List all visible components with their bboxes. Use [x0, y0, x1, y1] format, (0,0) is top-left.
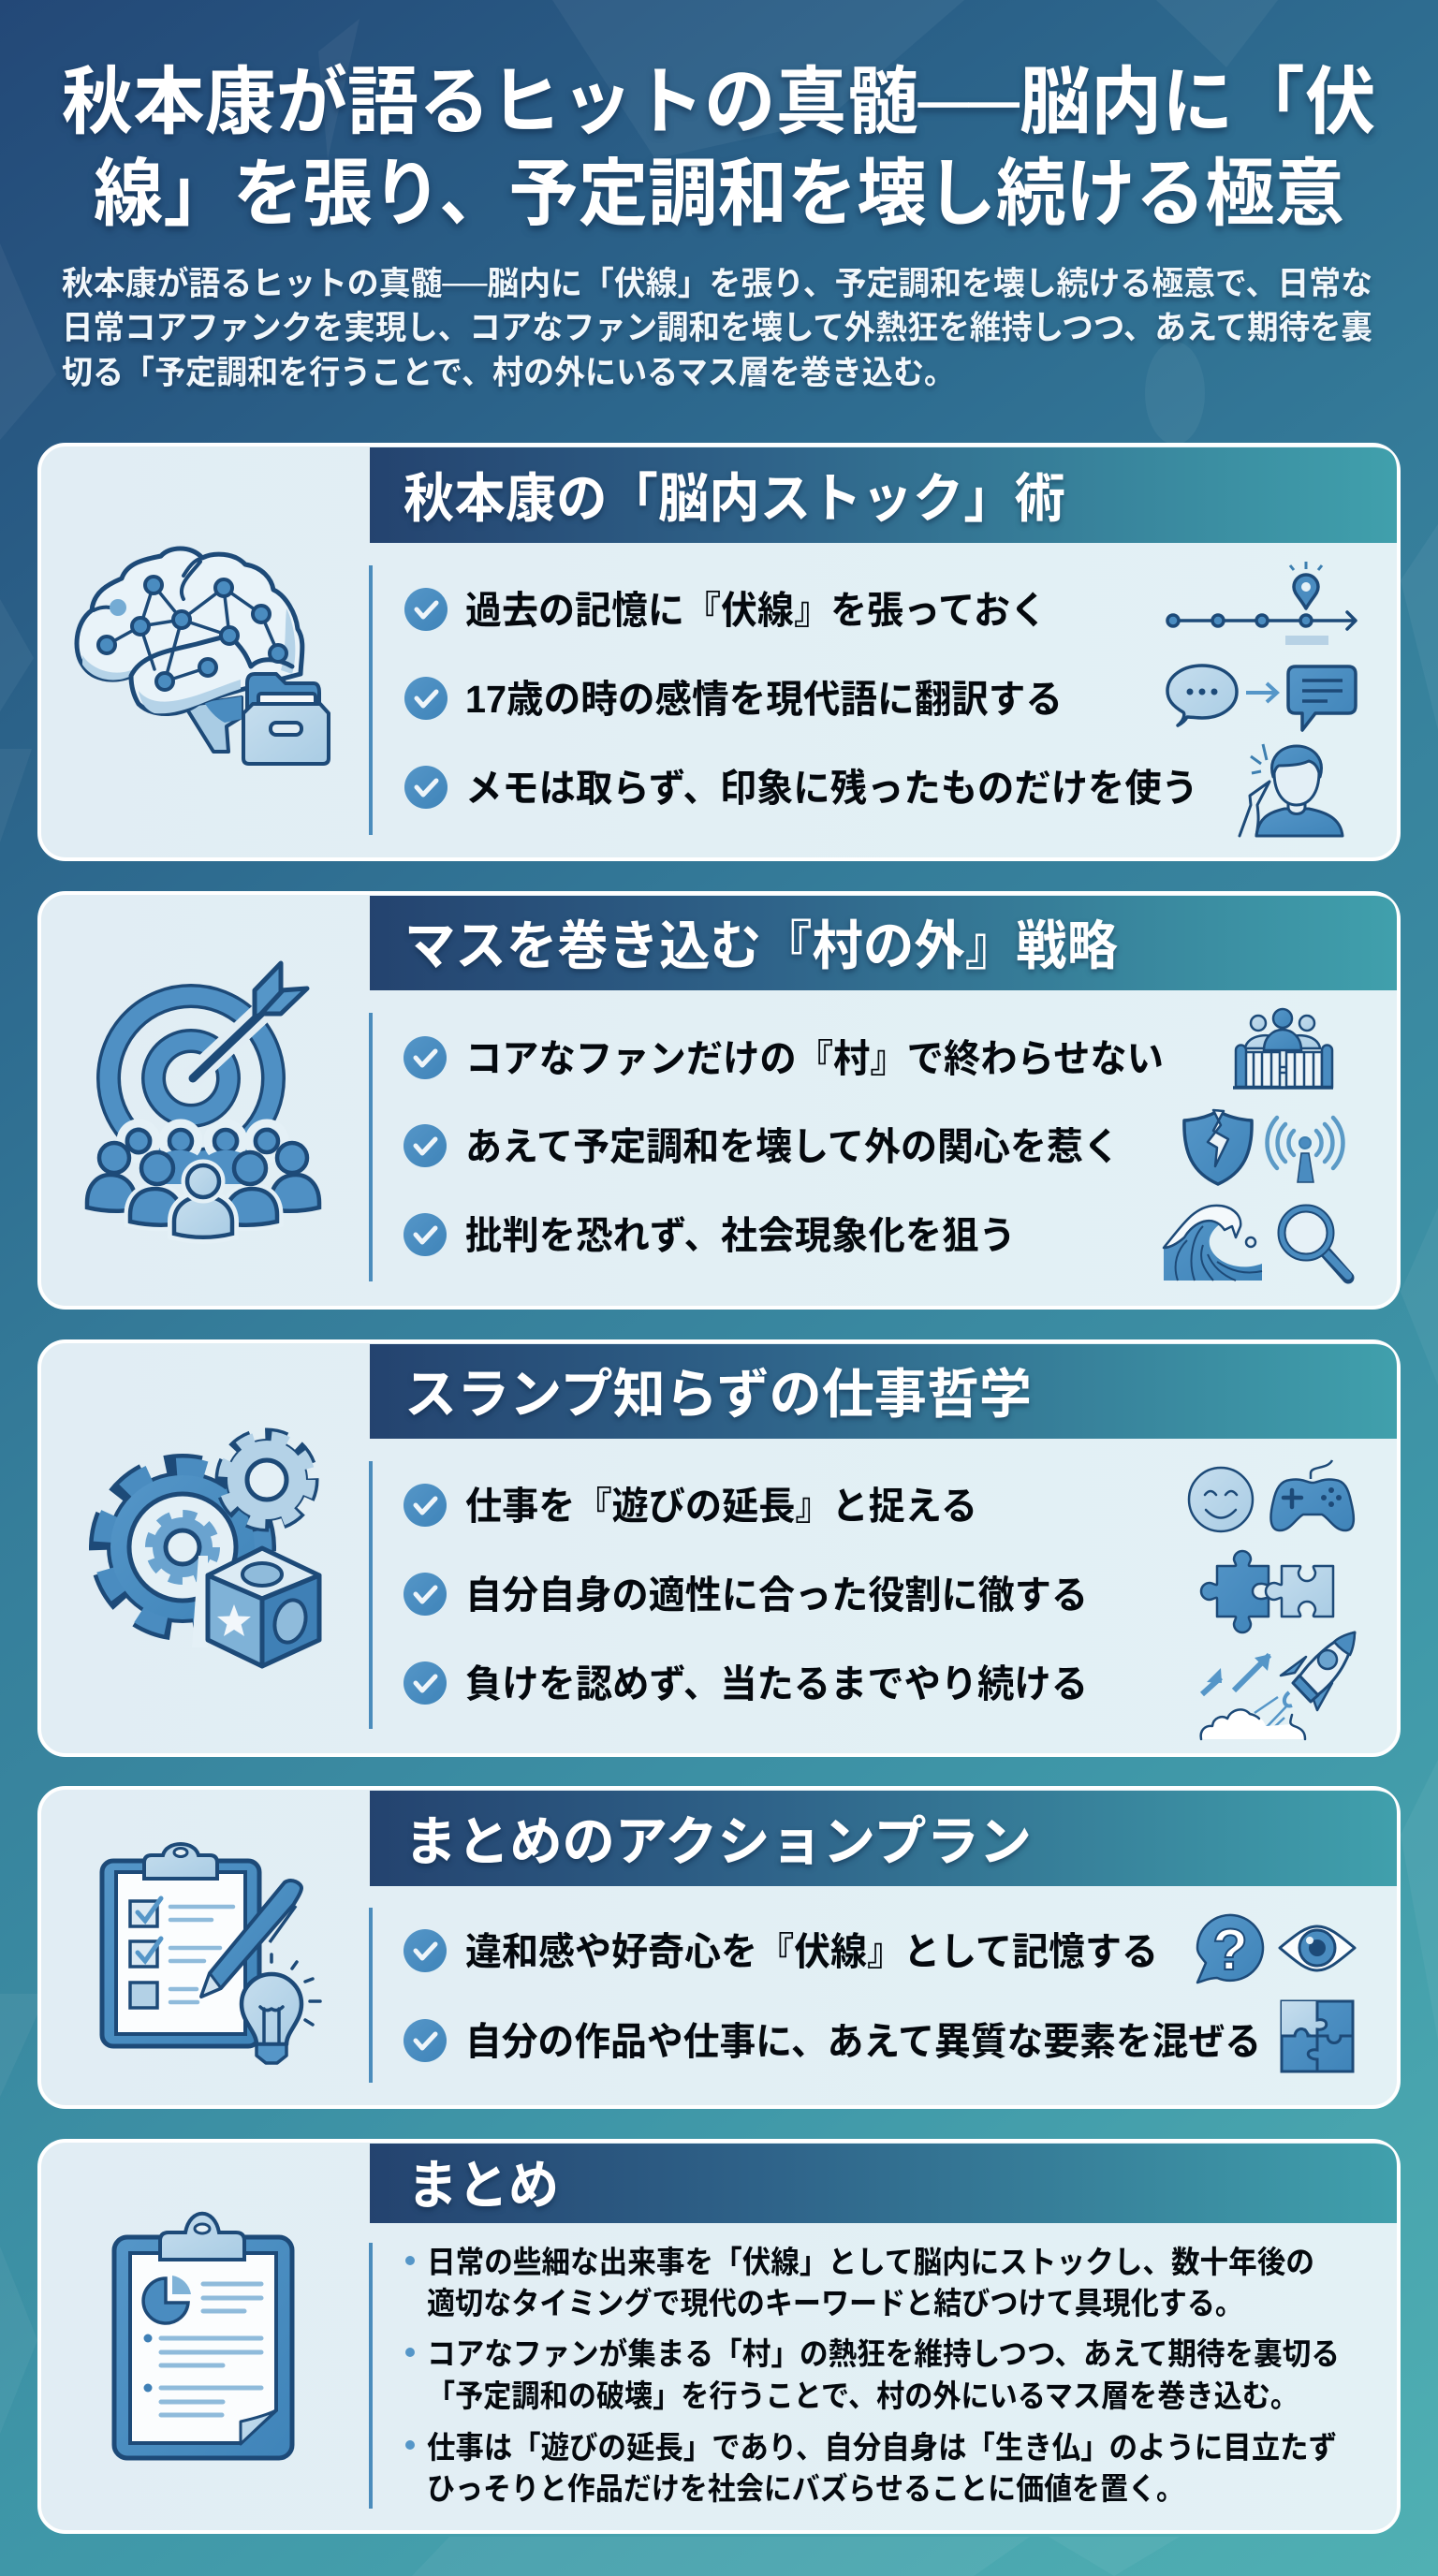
summary bullet 3: 仕事は「遊びの延長」であり、自分自身は「生き仏」のように目立たず — [427, 2430, 1337, 2465]
item with check: 違和感や好奇心を『伏線』として記憶する — [465, 1930, 1158, 1973]
icon: big wave — [1164, 1206, 1262, 1281]
icon: eye — [1280, 1926, 1355, 1970]
item with check: あえて予定調和を壊して外の関心を惹く — [465, 1125, 1120, 1168]
icon: game controller — [1271, 1460, 1354, 1530]
icon: village fence with people — [1233, 1009, 1333, 1088]
icon: checklist clipboard with pen and bulb — [102, 1844, 320, 2063]
title: 秋本康が語るヒットの真髄──脳内に「伏 — [62, 60, 1376, 143]
item with check: 負けを認めず、当たるまでやり続ける — [465, 1662, 1088, 1705]
icon: gears with toy cube — [78, 1436, 319, 1666]
item with check: 17歳の時の感情を現代語に翻訳する — [465, 678, 1063, 721]
heading: スランプ知らずの仕事哲学 — [404, 1365, 1032, 1425]
intro text — [62, 266, 1372, 391]
summary bullet 1: 日常の些細な出来事を「伏線」として脳内にストックし、数十年後の — [427, 2245, 1314, 2279]
icon: target with arrow and crowd — [87, 963, 319, 1237]
icon: person pointing to temple — [1240, 744, 1343, 836]
icon: four piece puzzle — [1282, 2001, 1353, 2071]
icon: speech bubbles translation — [1167, 666, 1356, 730]
summary bullet 1 — [405, 2245, 1314, 2320]
icon: broadcast antenna — [1268, 1118, 1343, 1182]
item with check: メモは取らず、印象に残ったものだけを使う — [465, 767, 1198, 810]
panel: スランプ知らずの仕事哲学 — [39, 1341, 1399, 1755]
heading: マスを巻き込む『村の外』戦略 — [404, 916, 1118, 976]
item with check: 批判を恐れず、社会現象化を狙う — [465, 1214, 1016, 1257]
summary bullet 2: コアなファンが集まる「村」の熱狂を維持しつつ、あえて期待を裏切る — [427, 2336, 1340, 2371]
item with check: コアなファンだけの『村』で終わらせない — [465, 1037, 1164, 1080]
intro text: 切る「予定調和を行うことで、村の外にいるマス層を巻き込む。 — [62, 355, 955, 391]
intro text: 日常コアファンクを実現し、コアなファン調和を壊して外熱狂を維持しつつ、あえて期待を裏 — [62, 310, 1372, 346]
icon: timeline with pin — [1167, 562, 1356, 645]
icon: rocket launch — [1201, 1632, 1355, 1739]
summary bullet 2: 「予定調和の破壊」を行うことで、村の外にいるマス層を巻き込む。 — [427, 2378, 1299, 2413]
panel: まとめのアクションプラン — [39, 1788, 1399, 2107]
summary bullet 1: 適切なタイミングで現代のキーワードと結びつけて具現化する。 — [427, 2286, 1243, 2320]
item with check: 仕事を『遊びの延長』と捉える — [465, 1485, 977, 1528]
heading: 秋本康の「脳内ストック」術 — [404, 469, 1065, 529]
icon: smiley — [1189, 1468, 1253, 1531]
panel: まとめ — [39, 2141, 1399, 2532]
summary bullet 2 — [405, 2336, 1340, 2413]
item with check: 過去の記憶に『伏線』を張っておく — [465, 589, 1047, 632]
panel: マスを巻き込む『村の外』戦略 — [39, 893, 1399, 1308]
item with check: 自分自身の適性に合った役割に徹する — [465, 1573, 1088, 1617]
title: 線」を張り、予定調和を壊し続ける極意 — [94, 152, 1344, 235]
icon: magnifier — [1282, 1208, 1348, 1278]
title — [62, 60, 1376, 235]
icon: cracked shield — [1184, 1110, 1252, 1184]
summary bullet 3 — [405, 2430, 1337, 2506]
icon: question bubble: ? — [1212, 1918, 1248, 1983]
intro text: 秋本康が語るヒットの真髄──脳内に「伏線」を張り、予定調和を壊し続ける極意で、日常な — [62, 266, 1372, 302]
icon: report clipboard — [114, 2214, 292, 2458]
icon: question bubble — [1197, 1915, 1263, 1983]
icon: puzzle pieces — [1201, 1551, 1333, 1632]
heading: まとめのアクションプラン — [404, 1812, 1032, 1872]
item with check: 自分の作品や仕事に、あえて異質な要素を混ぜる — [465, 2020, 1261, 2063]
heading: まとめ — [407, 2156, 559, 2216]
icon: brain with archive box — [77, 549, 329, 764]
panel: 秋本康の「脳内ストック」術 — [39, 445, 1399, 859]
summary bullet 3: ひっそりと作品だけを社会にバズらせることに価値を置く。 — [427, 2471, 1184, 2506]
